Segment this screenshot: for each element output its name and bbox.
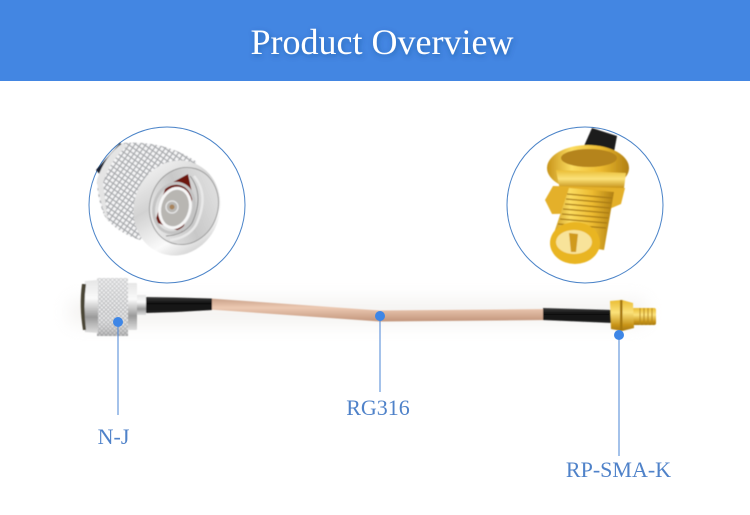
N connector detail circle [89, 127, 245, 283]
N connector front [82, 280, 98, 333]
callout: RG316 [346, 311, 410, 420]
left heat shrink [145, 297, 212, 313]
front ring [121, 149, 233, 267]
soft shadow [70, 300, 645, 324]
SMA threaded tail [632, 308, 656, 325]
flange washer [547, 145, 629, 191]
hex nut [556, 170, 626, 192]
callout: N-J [98, 317, 130, 449]
inner thread rings [170, 176, 203, 240]
black cable stub [96, 143, 127, 176]
cable assembly [70, 278, 656, 336]
N connector ring [128, 283, 137, 330]
callout: RP-SMA-K [566, 330, 671, 482]
N connector knurl [97, 278, 128, 336]
callout: RG316: RG316 [346, 395, 410, 420]
red insulator [155, 174, 193, 232]
front rim [550, 222, 600, 264]
center pin [170, 204, 174, 210]
right heat shrink [543, 308, 613, 323]
RP-SMA detail circle [507, 127, 663, 283]
knurled sleeve [97, 143, 197, 240]
SMA nut [610, 300, 634, 331]
header banner [0, 0, 750, 81]
N connector neck [137, 295, 146, 315]
center contact [569, 233, 578, 252]
callout: RP-SMA-K: RP-SMA-K [566, 457, 671, 482]
black cable stub [584, 128, 617, 152]
inner threads [148, 179, 200, 237]
title: Product Overview [251, 22, 513, 62]
braided cable [210, 298, 546, 322]
callout: N-J: N-J [98, 424, 130, 449]
threaded barrel [551, 188, 614, 250]
